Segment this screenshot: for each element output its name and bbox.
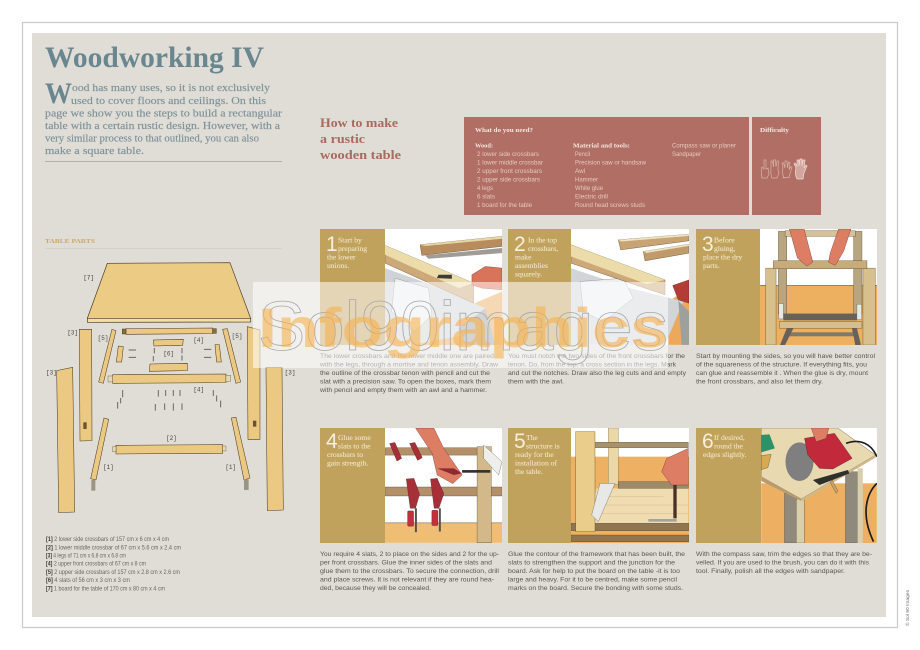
step 4 text — [320, 551, 500, 592]
step 2 text: and cut the notches. Draw also the leg cuts and and empty — [508, 370, 687, 377]
step 1 text: with pencil and empty them with an awl and a hammer. — [319, 387, 487, 394]
part labels: [1] — [225, 464, 236, 471]
step 1 label — [320, 229, 385, 345]
step 4 label — [320, 428, 385, 543]
intro text block: ood has many uses, so it is not exclusively — [72, 83, 270, 94]
step 5 label: 5 — [514, 430, 526, 453]
step 5 label: installation of — [515, 458, 557, 468]
heading: how to make a rustic wooden table — [320, 115, 401, 162]
heading: how to make a rustic wooden table: How to make — [320, 115, 398, 130]
step 6 illustration — [761, 428, 877, 543]
icon: hands showing level 4 of 4 — [761, 159, 807, 179]
step 2 text: You must notch the two sides of the front crossbars for the — [508, 353, 685, 360]
step 5 text: large and heavy. For it to be centred, make some pencil — [508, 576, 678, 584]
step 3 text: can glue and reassemble it . When the glue is dry, mount — [696, 370, 868, 377]
step 1 label: unions. — [327, 261, 349, 270]
step 5 label — [508, 428, 571, 543]
list: wood: 1 board for the table — [477, 202, 532, 209]
step 3 label: 3 — [702, 233, 714, 256]
list: wood: 6 slats — [477, 194, 495, 200]
step 5 text: board. Ask for help to put the board on the table -it is too — [508, 568, 680, 575]
step 2 text: them with the awl. — [508, 378, 564, 386]
step 6 label: If desired, — [714, 433, 745, 442]
step 4 label: Glue some — [338, 433, 371, 442]
list: wood: 1 lower middle crossbar — [477, 160, 543, 166]
step 4 text: per front crossbars. Glue the inner sides of the slats and — [320, 560, 492, 566]
watermark: Sol90images — [258, 287, 668, 365]
step 6 label: edges slightly. — [703, 450, 746, 459]
list: material and tools: Round head screws studs — [575, 202, 645, 209]
step 3 label: Before — [714, 236, 735, 244]
step 3 — [696, 229, 877, 386]
heading: how to make a rustic wooden table: wooden table — [320, 147, 401, 162]
intro text block: W — [45, 77, 72, 110]
list: wood: 2 lower side crossbars — [477, 151, 539, 158]
list: wood — [475, 142, 543, 209]
step 4 label: crossbars to — [327, 450, 363, 459]
step 5 label: structure is — [526, 442, 560, 450]
panel: what do you need — [464, 117, 749, 215]
step 2 illustration — [571, 229, 689, 345]
step 5 text — [508, 551, 685, 592]
step 2 label: assemblies — [515, 261, 548, 270]
image credit: © Sol 90 Images — [904, 589, 910, 626]
side crossbars — [91, 329, 250, 491]
crossbars — [108, 328, 231, 454]
list: material and tools: Awl — [575, 168, 585, 175]
part labels: [7] — [83, 274, 94, 281]
step 3 text: Start by mounting the sides, so you will have better control — [696, 353, 876, 360]
step 5 text: Glue the contour of the framework that has been built, the — [508, 551, 685, 558]
step 2 — [508, 229, 689, 386]
part labels: [1] — [103, 464, 114, 471]
step 1 text: the outline of the crossbar tenon with pencil and cut the — [320, 370, 490, 377]
step 2 label: In the top — [528, 236, 557, 244]
step 6 — [696, 428, 877, 575]
step 5 label: ready for the — [515, 450, 554, 459]
step 6 text: velled. If you are used to the brush, you can do it with this — [696, 560, 870, 566]
step 1 label: 1 — [326, 233, 338, 256]
step 1 label: the lower — [327, 252, 356, 262]
step 6 text — [696, 551, 872, 575]
intro text block: make a square table. — [45, 146, 144, 157]
step 2 label: 2 — [514, 233, 526, 256]
step 6 label: 6 — [702, 430, 714, 453]
step 1 text: with the legs, through a mortise and tenon assembly. Draw — [319, 362, 498, 368]
step 1 text: The lower crossbars and the lower middle one are paired — [320, 353, 494, 360]
step 2 label — [508, 229, 571, 345]
step 4 label: slats to the — [338, 442, 371, 450]
step 3 text: of the squareness of the structure. If everything fits, you — [696, 362, 867, 368]
intro text block: page we show you the steps to build a rectangular — [45, 108, 283, 120]
list: material and tools: Material and tools: — [573, 142, 630, 150]
watermark: Infographics — [258, 296, 668, 359]
part labels: [5] — [98, 335, 108, 342]
step 3 illustration — [760, 229, 877, 345]
step 6 label: round the — [714, 442, 744, 450]
step 6 text: tool. Finally, polish all the edges with sandpaper. — [696, 568, 845, 575]
intro text block: very similar process to that outlined, you can also — [45, 134, 259, 144]
parts list: [7] 1 board for the table of 170 cm x 80 cm x 4 cm — [46, 586, 165, 592]
step 1 text — [319, 353, 498, 394]
list: more tools: Compass saw or planer — [672, 142, 736, 150]
step 2 label: squarely. — [515, 270, 542, 278]
legs — [57, 327, 283, 513]
step 3 text: the front crossbars, and also let them dry. — [696, 378, 823, 386]
table top board — [87, 263, 251, 322]
step 5 — [508, 428, 689, 592]
panel: difficulty: Difficulty — [760, 127, 790, 134]
parts list: [6] 4 slats of 56 cm x 3 cm x 3 cm — [46, 577, 130, 584]
step 3 label — [696, 229, 760, 345]
step 1 — [319, 229, 502, 394]
list: material and tools: Hammer — [575, 176, 598, 184]
step 4 label: 4 — [326, 430, 338, 453]
panel: what do you need: What do you need? — [475, 127, 533, 134]
intro text block — [45, 77, 283, 157]
step 4 label: gain strength. — [327, 458, 368, 468]
step 2 text — [508, 353, 687, 386]
screws and arrows — [118, 348, 221, 411]
list: wood: 4 legs — [477, 185, 493, 192]
heading: how to make a rustic wooden table: a rustic — [320, 131, 365, 146]
step 5 label: The — [526, 433, 538, 442]
parts list: [2] 1 lower middle crossbar of 67 cm x 5.6 cm x 2.4 cm — [46, 544, 181, 552]
step 5 illustration — [571, 428, 689, 543]
list: more tools — [672, 142, 736, 158]
part labels — [46, 274, 295, 471]
step 1 label: Start by — [338, 236, 362, 244]
heading: table parts: TABLE PARTS — [45, 239, 96, 245]
step 2 text: tenon. Do, from the top, a cross section in the legs. Mark — [508, 362, 677, 368]
step 5 text: marks on the board. Secure the bonding with some studs. — [508, 585, 683, 592]
step 4 text: ded, because they will be concealed. — [320, 585, 431, 592]
parts list — [46, 536, 181, 592]
list: material and tools: White glue — [575, 185, 603, 192]
parts list: [1] 2 lower side crossbars of 157 cm x 6 cm x 4 cm — [46, 536, 169, 543]
step 2 label: make — [515, 252, 532, 262]
list: wood: Wood: — [475, 142, 493, 150]
title: Woodworking IV — [45, 41, 264, 74]
part labels: [4] — [193, 337, 204, 344]
list: material and tools: Pencil — [575, 151, 590, 158]
part labels: [4] — [193, 386, 204, 393]
step 1 illustration — [385, 229, 502, 345]
parts list: [4] 2 upper front crossbars of 67 cm x 8 cm — [46, 560, 146, 568]
step 4 text: and place screws. It is not relevant if they are round hea- — [320, 576, 494, 584]
panel: difficulty — [752, 117, 821, 215]
list: material and tools: Precision saw or handsaw — [575, 160, 646, 166]
parts list: [5] 2 upper side crossbars of 157 cm x 2.8 cm x 2.6 cm — [46, 569, 180, 576]
part labels: [6] — [163, 351, 174, 358]
step 4 text: You require 4 slats, 2 to place on the sides and 2 for the up- — [320, 551, 499, 558]
parts list: [3] 4 legs of 71 cm x 6.8 cm x 6.8 cm — [46, 552, 126, 560]
part labels: [5] — [232, 333, 242, 340]
step 3 label: parts. — [703, 261, 720, 270]
step 4 illustration — [385, 428, 502, 543]
step 3 label: place the dry — [703, 252, 742, 262]
step 6 label — [696, 428, 761, 543]
step 1 text: slat with a precision saw. To open the boxes, mark them — [320, 378, 491, 386]
part labels: [3] — [285, 369, 295, 376]
step 1 label: preparing — [338, 244, 367, 253]
part labels: [3] — [46, 369, 57, 376]
step 4 text: glue them to the crossbars. To secure the connection, drill — [320, 568, 500, 575]
part labels: [3] — [67, 329, 78, 336]
step 3 label: gluing, — [714, 244, 735, 253]
step 3 text — [696, 353, 876, 386]
list: wood: 2 upper side crossbars — [477, 176, 540, 184]
list: wood: 2 upper front crossbars — [477, 168, 542, 175]
intro text block: table with a certain rustic design. However, with a — [45, 121, 281, 132]
step 4 — [320, 428, 502, 592]
part labels: [2] — [166, 435, 177, 442]
exploded diagram of table parts — [46, 263, 295, 513]
step 6 text: With the compass saw, trim the edges so that they are be- — [696, 551, 872, 558]
list: material and tools — [573, 142, 646, 209]
step 2 label: crossbars, — [528, 244, 558, 253]
slats — [116, 339, 221, 371]
step 5 label: the table. — [515, 467, 543, 476]
list: material and tools: Electric drill — [575, 194, 608, 200]
step 5 text: slats to strengthen the support and the junction for the — [508, 560, 675, 566]
list: more tools: Sandpaper — [672, 151, 701, 158]
intro text block: used to cover floors and ceilings. On this — [71, 96, 266, 107]
